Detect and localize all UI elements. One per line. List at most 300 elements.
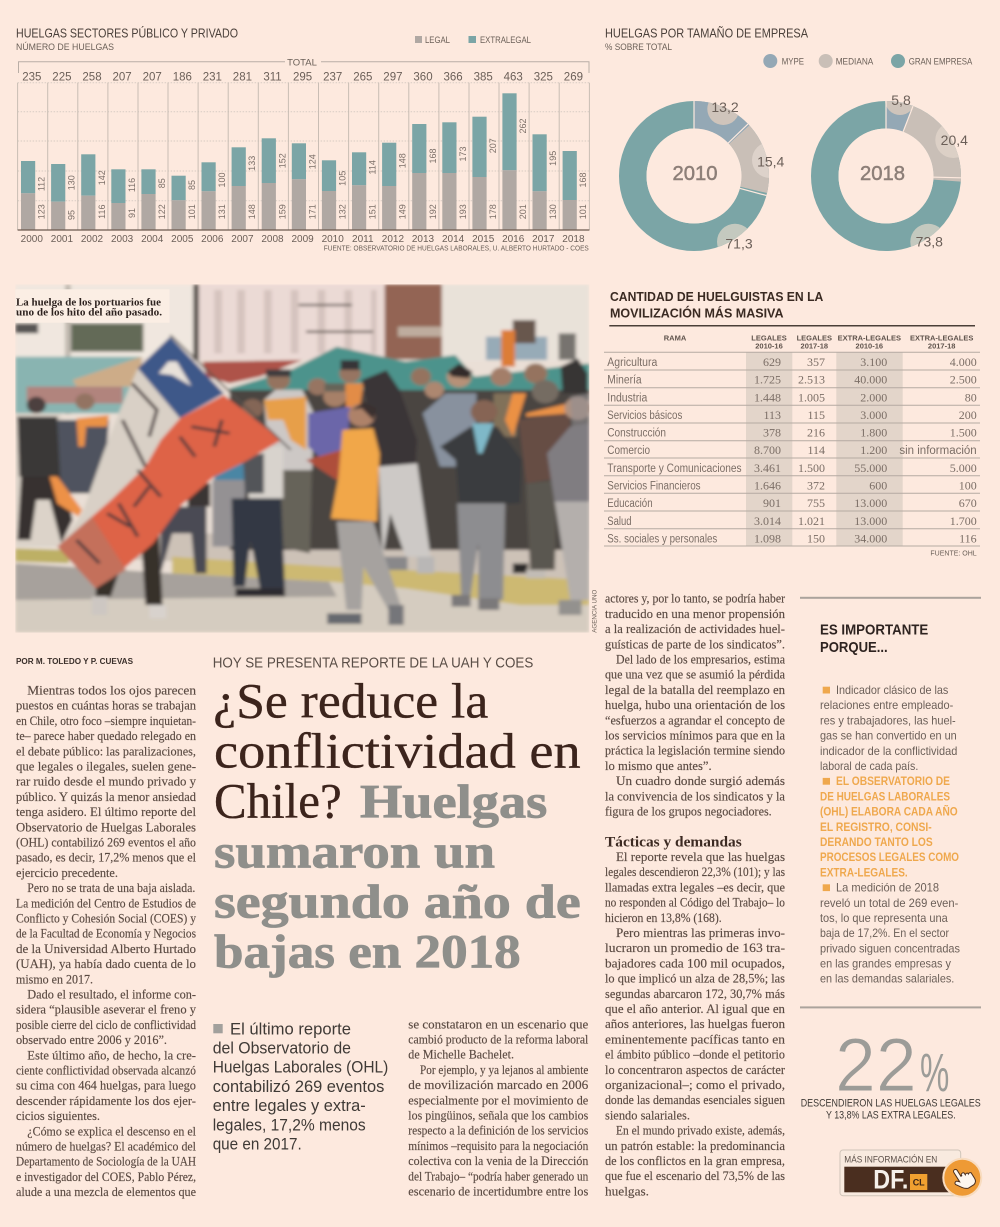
subheading: tácticas y demandas: Tácticas y demandas [605, 835, 742, 851]
table column extra-legales 2010-16: 34.000 [854, 532, 887, 546]
donut 2018 [825, 85, 971, 260]
year axis labels: 2017 [532, 234, 555, 245]
legal value labels: 148 [247, 204, 257, 219]
extralegal value labels: 207 [488, 138, 498, 153]
article column 1: su cima con 464 huelgas, para luego [16, 1078, 196, 1093]
bullet three: baja de 17,2%. En el sector [820, 926, 949, 940]
df.cl link badge: CL [913, 1178, 925, 1188]
legal value labels: 91 [127, 208, 137, 218]
article column 1: e investigador del COES, Pablo Pérez, [16, 1169, 196, 1184]
legal value labels: 192 [428, 204, 438, 219]
deck paragraph: legales, 17,2% menos [213, 1116, 366, 1134]
article column 1: posible cierre del ciclo de conflictividad [16, 1017, 196, 1032]
totals row: 295 [293, 72, 312, 84]
legal value labels: 123 [37, 204, 47, 219]
totals row: 231 [203, 72, 222, 84]
table column extra-legales 2010-16: 13.000 [854, 496, 887, 510]
article column 3: a la realización de actividades huel- [605, 621, 785, 636]
totals row: 225 [52, 72, 71, 84]
donut legend: MEDIANA [836, 56, 874, 67]
table headers: EXTRA-LEGALES [910, 334, 973, 343]
extralegal value labels: 195 [548, 151, 558, 166]
article column 2: Por ejemplo, y ya lejanos al ambiente [420, 1062, 588, 1077]
article column 1: rar ruido desde el mundo privado y [16, 774, 196, 789]
article column 2: de movilización marcado en 2006 [408, 1077, 589, 1092]
headline: segundo año de [214, 876, 581, 929]
table column legales 2017-18: 357 [807, 355, 825, 369]
article column 1: público. Y quizás la menor ansiedad [16, 789, 196, 804]
table column extra-legales 2010-16: 1.800 [860, 426, 887, 440]
table column extra-legales 2017-18: 116 [959, 532, 977, 546]
bullet two: DE HUELGAS LABORALES [820, 789, 950, 803]
year axis labels: 2002 [81, 234, 104, 245]
article column 3: que una vez que se asumió la pérdida [605, 667, 785, 682]
legal value labels [37, 204, 588, 220]
totals row [22, 72, 583, 84]
article column 3: organizacional–; como el privado, [605, 1077, 785, 1092]
table headers: EXTRA-LEGALES [838, 334, 901, 343]
article column 2: mínimos –requisito para la negociación [408, 1138, 589, 1153]
article column 3: lucraron un promedio de 163 tra- [605, 940, 785, 955]
article column 3: práctica la legislación termine siendo [605, 743, 785, 758]
photo credit: AGENCIA UNO [592, 590, 598, 633]
table column legales 2017-18: 1.005 [798, 390, 825, 404]
article column 1: que legales o ilegales, suelen gene- [16, 758, 196, 774]
table column extra-legales 2017-18: 80 [965, 390, 977, 404]
deck paragraph: que en 2017. [213, 1135, 302, 1153]
totals row: 325 [534, 72, 553, 84]
year axis labels: 2007 [231, 234, 254, 245]
table column legales 2010-16: 3.014 [754, 514, 781, 528]
article column 3: el ámbito público –donde el petitorio [605, 1047, 785, 1062]
table title: MOVILIZACIÓN MÁS MASIVA [610, 306, 784, 321]
table headers: 2017-18 [801, 342, 828, 351]
bullet three: en las grandes empresas y [820, 957, 951, 971]
extralegal value labels: 85 [187, 180, 197, 190]
legal value labels: 159 [277, 204, 287, 219]
article column 3: los servicios mínimos para que en la [605, 728, 785, 742]
table column extra-legales 2017-18: 1.500 [950, 426, 977, 440]
article column 1: de la Universidad Alberto Hurtado [16, 941, 196, 956]
table title: CANTIDAD DE HUELGUISTAS EN LA [610, 290, 823, 304]
extralegal value labels: 85 [157, 178, 167, 188]
article column 1 [16, 682, 197, 1199]
article column 3: huelgas. [605, 1184, 649, 1199]
article column 1: tenga asidero. El último reporte del [16, 804, 196, 819]
table column extra-legales 2010-16: 2.000 [860, 390, 887, 404]
bullet two: EL OBSERVATORIO DE [836, 774, 950, 788]
article column 2: especialmente por el movimiento de [408, 1092, 589, 1107]
article column 3: siendo salariales. [605, 1107, 690, 1122]
donut heading: % SOBRE TOTAL [605, 42, 672, 53]
year axis labels: 2015 [472, 234, 495, 245]
donut 2010: 2010 [672, 162, 718, 185]
donut legend: MYPE [782, 56, 804, 67]
table column legales 2017-18: 1.500 [798, 461, 825, 475]
big stat 22%: 22 [835, 1023, 917, 1108]
table column extra-legales 2010-16: 13.000 [854, 514, 887, 528]
bullet one: indicador de la conflictividad [820, 744, 957, 758]
deck paragraph [213, 1020, 388, 1153]
table sector names: Educación [607, 498, 653, 510]
bullet two: DERANDO TANTO LOS [820, 835, 933, 849]
chart source: FUENTE: OBSERVATORIO DE HUELGAS LABORALES, U. ALBERTO HURTADO - COES [324, 244, 589, 253]
article column 3: El reporte revela que las huelgas [616, 849, 785, 864]
year axis labels: 2011 [352, 234, 374, 245]
extralegal value labels: 124 [307, 154, 317, 169]
table column extra-legales 2017-18: sin información [899, 445, 977, 457]
table headers: LEGALES [751, 334, 787, 343]
article column 3: Pero mientras las primeras invo- [616, 925, 785, 940]
chart heading [16, 25, 238, 53]
table sector names: Ss. sociales y personales [607, 534, 718, 546]
bullet one [820, 683, 957, 773]
df.cl link badge: DF. [873, 1164, 908, 1194]
headline [213, 672, 581, 979]
article column 1: cicios siguientes. [16, 1108, 100, 1123]
bullet two: PROCESOS LEGALES COMO [820, 850, 959, 864]
headline: ¿Se reduce la [213, 672, 488, 728]
bullet two: EXTRA-LEGALES. [820, 865, 908, 879]
article column 1: ejercicio precedente. [16, 865, 118, 880]
legend: legal and extralegal: EXTRALEGAL [480, 35, 531, 46]
article column 3: de los conflictos en la gran empresa, [605, 1153, 785, 1168]
donut 2010: 13,2 [711, 99, 739, 115]
article column 3: que fue el escenario del 73,5% de las [605, 1168, 785, 1183]
bullet two: EL REGISTRO, CONSI- [820, 820, 932, 834]
table column extra-legales 2010-16: 1.200 [860, 443, 887, 457]
table column legales 2017-18: 755 [807, 496, 825, 510]
table column legales 2010-16 [754, 355, 781, 546]
table sector names: Construcción [607, 428, 666, 440]
table column legales 2017-18: 2.513 [798, 373, 825, 387]
table column extra-legales 2017-18: 4.000 [950, 355, 977, 369]
bullet one: relaciones entre empleado- [820, 698, 953, 712]
extralegal bars [21, 93, 577, 203]
article column 3: huelga, hubo una orientación de los [605, 697, 785, 712]
year axis labels: 2006 [201, 234, 224, 245]
panel: strike photo [15, 284, 599, 633]
donut legend [763, 54, 973, 68]
total bracket [18, 58, 589, 73]
big stat 22% [801, 1023, 981, 1121]
table sector names: Industria [607, 392, 648, 404]
article column 3: En el mundo privado existe, además, [616, 1123, 785, 1138]
totals row: 366 [444, 72, 463, 84]
table column legales 2017-18: 115 [807, 408, 825, 422]
big stat 22%: % [920, 1043, 949, 1103]
bullet three: en las demandas salariales. [820, 972, 954, 986]
article column 2: de Michelle Bachelet. [408, 1047, 514, 1062]
article column 1: pasado, es decir, 17,2% menos que el [16, 850, 196, 865]
bullet one: gas se han convertido en un [820, 729, 957, 743]
sidebar heading [820, 621, 928, 656]
year axis labels: 2004 [141, 234, 164, 245]
legal value labels: 131 [217, 204, 227, 219]
extralegal value labels: 152 [277, 153, 287, 168]
legal value labels: 130 [548, 204, 558, 219]
article column 1: (UAH), ya había dado cuenta de lo [16, 956, 196, 971]
bullet two: (OHL) ELABORA CADA AÑO [820, 804, 958, 819]
article column 1: mismo en 2017. [16, 971, 93, 986]
article column 2: respecto a la definición de los servicios [408, 1123, 588, 1138]
table column legales 2010-16: 1.725 [754, 373, 781, 387]
df.cl link badge: MÁS INFORMACIÓN EN [844, 1155, 937, 1166]
article column 1: descender rápidamente los dos ejer- [16, 1093, 196, 1108]
article column 1: Dado el resultado, el informe con- [27, 986, 196, 1002]
bullet three: La medición de 2018 [836, 881, 939, 895]
shaded columns [746, 352, 903, 546]
article column 3: legales descendieron 22,3% (101); y las [605, 864, 785, 879]
legal value labels: 101 [187, 204, 197, 219]
table column legales 2017-18: 372 [807, 478, 825, 492]
article column 3: donde las demandas esenciales siguen [605, 1092, 785, 1107]
totals row: 360 [413, 72, 433, 84]
article column 1: sidera “plausible aseverar el freno y [16, 1002, 196, 1017]
table column legales 2010-16: 629 [763, 355, 781, 369]
article column 3: lo que implicó un alza de 28,5%; las [605, 971, 785, 986]
article column 1: observado entre 2006 y 2016”. [16, 1032, 167, 1047]
totals row: 311 [263, 72, 282, 84]
year axis labels: 2000 [21, 234, 43, 245]
deck paragraph: Huelgas Laborales (OHL) [213, 1059, 388, 1077]
article column 3: un patrón estable: la predominancia [605, 1138, 785, 1153]
table column extra-legales 2010-16 [854, 355, 887, 546]
bullet three [820, 881, 960, 986]
legal value labels: 151 [368, 204, 378, 219]
total bracket: TOTAL [287, 58, 317, 68]
year axis labels [21, 234, 585, 245]
article column 2: del Trabajo– “podría haber generado un [408, 1168, 589, 1183]
legal value labels: 122 [157, 204, 167, 219]
headline: bajas en 2018 [214, 926, 521, 979]
article column 3: guísticas de parte de los sindicatos”. [605, 636, 785, 651]
table sector names: Salud [607, 516, 632, 528]
donut 2018: 5,8 [891, 92, 911, 108]
article column 3: lo concentraron aspectos de carácter [605, 1062, 786, 1077]
extralegal value labels: 168 [578, 172, 588, 188]
extralegal value labels: 168 [428, 148, 438, 164]
table column extra-legales 2010-16: 600 [869, 478, 887, 492]
table sector names: Servicios básicos [607, 410, 683, 422]
article column 1: número de huelgas? El académico del [16, 1138, 196, 1154]
icon: hand cursor [943, 1159, 981, 1197]
article column 2: escenario de incertidumbre entre los [408, 1184, 588, 1199]
legal value labels: 178 [488, 204, 498, 219]
sidebar heading: ES IMPORTANTE [820, 621, 928, 638]
sidebar heading: PORQUE... [820, 639, 888, 656]
article column 1: en Chile, otro foco –siempre inquietan- [16, 713, 196, 728]
bullet three: reveló un total de 269 even- [820, 896, 958, 910]
legal value labels: 171 [307, 204, 317, 219]
article column 3: segundas abarcaron 172, 30,7% más [605, 986, 785, 1001]
stat caption [801, 1098, 981, 1121]
article column 1: ciente conflictividad observada alcanzó [16, 1062, 196, 1078]
article column 1: de la Facultad de Economía y Negocios [16, 926, 196, 941]
article column 3: que el año anterior. Al igual que en [605, 1001, 785, 1016]
legal value labels: 149 [398, 204, 408, 219]
article column 3: traducido en una menor propensión [605, 606, 785, 621]
table column legales 2010-16: 1.098 [754, 532, 781, 546]
table title [610, 290, 823, 321]
table column legales 2017-18 [798, 355, 825, 546]
table column extra-legales 2017-18: 2.500 [950, 373, 977, 387]
stat caption: Y 13,8% LAS EXTRA LEGALES. [826, 1109, 956, 1121]
article column 2 [408, 1016, 589, 1199]
chart heading: HUELGAS SECTORES PÚBLICO Y PRIVADO [16, 25, 238, 40]
article column 2: se constataron en un escenario que [408, 1016, 589, 1031]
year axis labels: 2014 [442, 234, 465, 245]
donut 2010: 15,4 [757, 154, 785, 170]
table column extra-legales 2010-16: 3.100 [860, 355, 887, 369]
table column legales 2017-18: 1.021 [798, 514, 825, 528]
donut 2010: 71,3 [725, 235, 753, 251]
table sector names: Transporte y Comunicaciones [607, 463, 742, 475]
table column extra-legales 2017-18: 5.000 [950, 461, 977, 475]
bullet two [820, 774, 959, 879]
article column 1: La medición del Centro de Estudios de [16, 895, 196, 910]
article column 1: Departamento de Sociología de la UAH [16, 1154, 196, 1169]
table column legales 2017-18: 150 [807, 532, 825, 546]
totals row: 297 [383, 72, 402, 84]
bullet one: laboral de cada país. [820, 759, 918, 773]
totals row: 281 [233, 72, 252, 84]
legend: legal and extralegal: LEGAL [425, 35, 450, 46]
panel: es importante porque [800, 597, 981, 1008]
donut 2018: 73,8 [916, 234, 943, 250]
photo caption: uno de los hito del año pasado. [16, 306, 162, 318]
article column 3: Del lado de los empresarios, estima [616, 652, 785, 666]
photo caption: La huelga de los portuarios fue [16, 296, 161, 308]
table headers: 2017-18 [928, 342, 955, 351]
table column extra-legales 2010-16: 40.000 [854, 373, 887, 387]
extralegal value labels: 114 [368, 160, 378, 174]
table column legales 2010-16: 1.448 [754, 390, 781, 404]
deck paragraph: El último reporte [230, 1020, 351, 1038]
table headers: 2010-16 [755, 342, 783, 351]
article column 1: Mientras todos los ojos parecen [27, 682, 197, 698]
headline: Huelgas [360, 776, 547, 829]
table column legales 2010-16: 1.646 [754, 478, 781, 492]
totals row: 207 [113, 72, 132, 84]
article column 1: puestos en cuántas horas se trabajan [16, 698, 196, 713]
byline: POR M. TOLEDO Y P. CUEVAS [16, 657, 134, 666]
article column 3: eminentemente pacíficas tanto en [605, 1031, 786, 1046]
donut 2018: 20,4 [941, 132, 968, 148]
headline: sumaron un [214, 826, 495, 879]
year axis labels: 2018 [562, 234, 585, 245]
extralegal value labels: 148 [398, 153, 408, 168]
extralegal value labels: 133 [247, 156, 257, 171]
totals row: 463 [504, 72, 523, 84]
extralegal value labels: 130 [67, 175, 77, 190]
table headers: RAMA [664, 334, 687, 343]
donut heading [605, 26, 809, 53]
photo: port workers with Chilean flag [15, 284, 591, 633]
article column 3: legal de la batalla del reemplazo en [605, 682, 785, 697]
table column extra-legales 2010-16: 3.000 [860, 408, 887, 422]
kicker: HOY SE PRESENTA REPORTE DE LA UAH Y COES [213, 655, 533, 671]
legal value labels: 116 [97, 205, 107, 219]
table column legales 2010-16: 113 [763, 408, 781, 422]
article column 1: Pero no se trata de una baja aislada. [27, 880, 195, 895]
year axis labels: 2009 [291, 234, 314, 245]
article column 2: colectiva con la venia de la Dirección [408, 1153, 589, 1168]
article column 1: Este último año, de hecho, la cre- [27, 1047, 196, 1062]
bullet three: privado siguen concentradas [820, 941, 960, 955]
panel: strikes by sector bar chart [16, 25, 589, 253]
extralegal value labels: 100 [217, 172, 227, 188]
article column 3: figura de los grupos negociadores. [605, 804, 772, 818]
year axis labels: 2012 [382, 234, 404, 245]
legal value labels: 132 [338, 204, 348, 219]
year axis labels: 2013 [412, 234, 435, 245]
extralegal value labels: 142 [97, 170, 107, 185]
table column extra-legales 2010-16: 55.000 [854, 461, 887, 475]
article column 3: actores y, por lo tanto, se podría haber [605, 591, 786, 606]
totals row: 269 [564, 72, 583, 84]
panel: strikes by company size donuts [605, 26, 973, 260]
article column 3: no responden al Código del Trabajo– lo [605, 895, 785, 910]
article column 1: (OHL) contabilizó 269 eventos el año [16, 834, 196, 850]
extralegal value labels [37, 118, 588, 192]
table column legales 2010-16: 378 [763, 426, 781, 440]
article column 3: llamadas extra legales –es decir, que [605, 879, 785, 894]
table column legales 2010-16: 8.700 [754, 443, 781, 457]
article column 1: alude a una mezcla de elementos que [16, 1184, 196, 1199]
year axis labels: 2016 [502, 234, 525, 245]
article column 3 [605, 591, 786, 1199]
table column extra-legales 2017-18: 1.700 [950, 514, 977, 528]
table column legales 2017-18: 114 [807, 443, 825, 457]
year axis labels: 2003 [111, 234, 134, 245]
totals row: 385 [474, 72, 493, 84]
article column 1: Observatorio de Huelgas Laborales [16, 819, 196, 834]
headline: conflictividad en [214, 723, 581, 779]
extralegal value labels: 262 [518, 118, 528, 134]
totals row: 186 [173, 72, 192, 84]
chart heading: NÚMERO DE HUELGAS [16, 42, 114, 53]
legal value labels: 193 [458, 204, 468, 219]
table sector names: Comercio [607, 445, 650, 457]
deck paragraph: contabilizó 269 eventos [213, 1078, 384, 1096]
headline: Chile? [214, 773, 342, 829]
article column 3: “esfuerzos a agrandar el concepto de [605, 712, 785, 727]
totals row: 237 [323, 72, 342, 84]
extralegal value labels: 116 [127, 178, 137, 192]
table sector names: Agricultura [607, 357, 658, 369]
article column 3: Un cuadro donde surgió además [616, 773, 785, 788]
bullet three: tos, lo que representa una [820, 911, 948, 925]
panel: strikers table [604, 290, 980, 558]
bullet one: res y trabajadores, las huel- [820, 713, 956, 727]
table headers: LEGALES [797, 334, 832, 343]
df.cl link badge [840, 1150, 981, 1197]
table source: FUENTE: OHL [930, 551, 977, 558]
donut legend: GRAN EMPRESA [909, 56, 973, 67]
donut heading: HUELGAS POR TAMAÑO DE EMPRESA [605, 26, 809, 40]
article column 3: hicieron en 13,8% (168). [605, 910, 722, 925]
totals row: 258 [82, 72, 102, 84]
article column 3: lo mismo que antes”. [605, 758, 712, 773]
legal value labels: 201 [518, 204, 528, 219]
extralegal value labels: 173 [458, 146, 468, 162]
extralegal value labels: 112 [37, 177, 47, 191]
article column 2: los pingüinos, señala que los cambios [408, 1108, 588, 1122]
article column 2: cambió producto de la reforma laboral [408, 1032, 589, 1046]
photo caption [15, 289, 169, 323]
year axis labels: 2001 [51, 234, 73, 245]
